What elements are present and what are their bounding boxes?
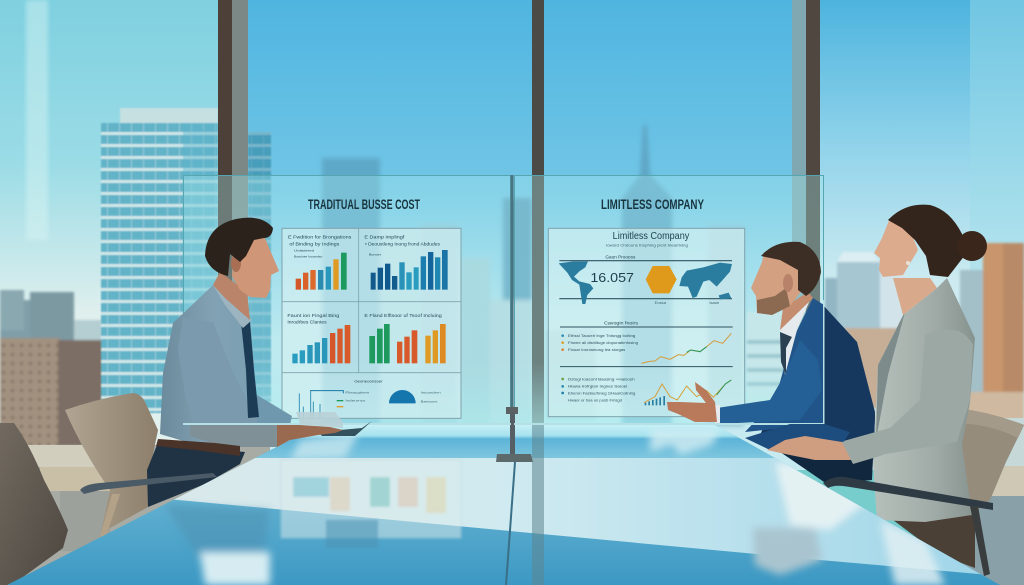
hand [667, 382, 717, 422]
panel bottom edges [183, 300, 824, 425]
panel: limitless company [514, 176, 824, 424]
reflected dark block [326, 520, 378, 548]
bottom section: Dstogi Ioasont Baosing +Haisosh [568, 377, 635, 381]
line chart: growth [641, 333, 731, 363]
ear [783, 274, 793, 292]
neck [893, 278, 937, 315]
map section: Gaon Prooess [605, 255, 635, 260]
growth section [560, 320, 733, 367]
skyline: left buildings [0, 290, 108, 446]
chart 1 labels: E Fwdition for Brongations [288, 235, 352, 240]
glass divider stand [496, 175, 533, 462]
hair bun [957, 231, 987, 261]
summary strip: Intoundern [421, 390, 441, 394]
summary strip: Bastouns [421, 400, 438, 404]
earring [906, 261, 910, 265]
chart 1 labels: of Binding by Indings [289, 241, 340, 246]
bar chart 1 [296, 253, 347, 290]
upper sleeve [178, 317, 277, 447]
map section [559, 255, 732, 305]
trousers [147, 445, 245, 507]
left man's hand and laptop on table [277, 412, 372, 447]
ear [231, 254, 241, 272]
dashboard: limitless company [548, 228, 745, 417]
small bars [645, 396, 665, 405]
bar chart 2 [371, 250, 448, 290]
person: woman on right in grey suit [840, 205, 987, 522]
world map: americas [559, 261, 593, 304]
chart 1 labels: Urdadered [294, 249, 314, 253]
chart 2 labels: • Deoustleng Inong frond Abdudes [365, 241, 441, 246]
suit dark back [760, 305, 875, 460]
chart 1 labels [288, 235, 352, 258]
chart 2 labels: Bonoer [369, 252, 381, 256]
hair [761, 242, 821, 296]
chart 3 labels: Faunt ion Fingal Bing [287, 313, 340, 318]
neck [780, 292, 813, 330]
bottom section: Eheron Fastoe/Sneg 1/Haa/Colining [568, 391, 635, 395]
growth section: Cavogin fnoirs [604, 320, 638, 325]
summary strip: Flisacgtiven [345, 390, 370, 394]
face [874, 218, 918, 277]
inner shirt [876, 312, 905, 440]
reflected people [165, 430, 945, 585]
face [232, 232, 279, 298]
summary strip: Indeumcs [345, 399, 366, 403]
glass conference table [0, 425, 1024, 585]
person: man in navy suit [667, 242, 875, 484]
navy sleeve and woman's hand over table edge [745, 424, 900, 464]
cuff [715, 405, 720, 423]
armrests [80, 473, 993, 576]
world map: eurasia [679, 263, 732, 298]
collar [213, 285, 252, 328]
map section: Eossa [655, 301, 666, 305]
summary strip: Geoneoonsoer [354, 380, 384, 384]
face [751, 250, 806, 315]
chart 1 labels: Bosoinee Inocerdso [294, 254, 323, 258]
table centre seam [505, 462, 516, 585]
heading: limitless company: LIMITLESS COMPANY [601, 197, 704, 212]
dashboard subtitle: Iowsrd Chdoons thsphing picnt bloarriving [606, 244, 688, 248]
hexagon [646, 266, 677, 293]
window mullions [218, 0, 820, 445]
beard [757, 288, 790, 315]
map section: Isaoe [709, 301, 719, 305]
chart 3 labels [287, 313, 340, 325]
shirt and collar [780, 300, 810, 375]
growth section: Fhwee ali disiriltuge cloponatimfosing [568, 341, 638, 345]
tie [241, 322, 259, 418]
arm [840, 329, 973, 462]
hair [205, 218, 273, 276]
dashboard title: Limitless Company [613, 231, 689, 242]
skyline: main glass tower [101, 108, 271, 413]
summary strip [299, 380, 441, 417]
hair [888, 205, 965, 277]
line chart: bottom [644, 380, 731, 403]
panel: traditional business cost [184, 176, 510, 424]
far forearm [257, 395, 292, 425]
neck [213, 272, 250, 320]
dashboard: four bar charts and summary [282, 228, 461, 418]
sleeve [717, 340, 822, 424]
chart 3 labels: Inrodrbes Clantes [287, 320, 327, 325]
bottom section: Hlawa Irofrgian Ingnes Saroel [568, 385, 628, 389]
skyline: distant towers behind panels [322, 125, 744, 430]
mullion reflection [532, 425, 544, 585]
sleeve below panel edge [190, 424, 277, 447]
growth section: Ethssl Taoueir Inge Tnisngg bolting [568, 334, 635, 338]
chair: right [893, 408, 1024, 568]
tie [780, 332, 792, 375]
shirt torso [160, 285, 262, 446]
skyline: right buildings [747, 243, 1024, 420]
chair: foreground left [0, 423, 68, 585]
bar chart 4 [369, 324, 446, 363]
big number: 16.057 [590, 270, 634, 285]
person: man on left in shirt and tie [147, 218, 292, 507]
suit body [873, 278, 975, 522]
reflected chart box [279, 476, 463, 540]
chart 4 labels: E Fland Elftsoor uf Tsoof Incluing [364, 313, 442, 318]
heading: traditional business cost: TRADITUAL BUSSE COST [308, 197, 420, 212]
belt [156, 439, 240, 456]
chart 2 labels: E Damp implingf [364, 235, 405, 240]
upper reflection band [252, 425, 778, 460]
growth section: Fiouar Ioorosinong lea siurgas [568, 348, 626, 352]
trousers [770, 415, 875, 484]
bottom section: Hwaor or hoa on posb Fmsgd [568, 398, 622, 402]
chart 2 labels [364, 235, 441, 256]
floor and window sill [0, 418, 1024, 585]
bar chart 3 [292, 325, 350, 363]
chair: back left [65, 393, 158, 537]
bottom section [561, 377, 731, 405]
white reflective band [174, 458, 981, 574]
suit front inside panel [745, 298, 824, 432]
